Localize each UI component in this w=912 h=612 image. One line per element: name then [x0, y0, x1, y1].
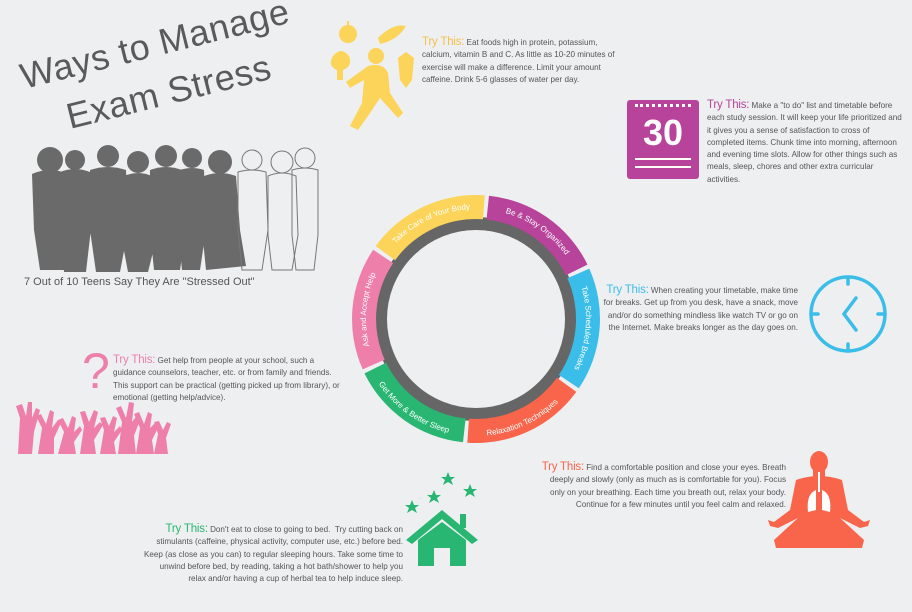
icon: meditation figure — [768, 451, 870, 548]
segment: relaxation techniques: Relaxation Techniques — [486, 400, 558, 436]
segment: be & stay organized: Be & Stay Organized — [506, 208, 570, 255]
text block: help: Try This: Get help from people at your school, such a guidance counselors, teacher, etc. or from family and friends. This support can be practical (getting picked up from library), or emotional (getting help/advice). — [113, 354, 340, 402]
segment: ask and accept help — [352, 250, 393, 370]
segment: ask and accept help: Ask and Accept Help — [360, 272, 376, 346]
segment: get more & better sleep: Get More & Better Sleep — [380, 382, 449, 434]
segment: relaxation techniques — [467, 378, 576, 443]
icon: runner with food — [330, 21, 414, 130]
segment: be & stay organized — [486, 196, 588, 276]
subtitle: 7 Out of 10 Teens Say They Are "Stressed Out" — [24, 276, 255, 288]
icon: calendar 30 — [627, 100, 699, 179]
text block: organized: Try This: Make a "to do" list and timetable before each study session. It will keep your life prioritized and it gives you a sense of satisfaction to cross of completed items. Chunk time into morning, afternoon and evening time slots. Allow for other things such as meals, sleep, chores and other extra curricular activities. — [707, 99, 902, 184]
icon: raised hands — [16, 402, 171, 454]
segment: get more & better sleep — [364, 362, 466, 442]
segment: take scheduled breaks — [559, 268, 600, 388]
segment: take care of your body — [376, 195, 485, 260]
icon: calendar 30: 30 — [643, 112, 683, 153]
icon: question mark: ? — [82, 343, 110, 399]
silhouettes group — [32, 145, 318, 272]
text block: breaks: Try This: When creating your timetable, make time for breaks. Get up from you desk, have a snack, move and/or do something mindless like watch TV or go on the Internet. Make breaks longer as the day goes on. — [604, 284, 798, 332]
text block: relaxation: Try This: Find a comfortable position and close your eyes. Breath deeply and slowly (only as much as is comfortable for you). Focus only on your breathing. Each time you breath out, relax your body. Continue for a few minutes until you feel calm and relaxed. — [542, 461, 786, 509]
text block: sleep: Try This: Don't eat to close to going to bed. Try cutting back on stimulants (caffeine, physical activity, computer use, etc.) before bed. Keep (as close as you can) to regular sleeping hours. Take some time to unwind before bed, by reading, taking a hot bath/shower to help you relax and/or having a cup of herbal tea to help induce sleep. — [144, 523, 403, 583]
icon: house with moon and stars — [405, 472, 478, 566]
icon: clock — [809, 275, 887, 353]
segment: take scheduled breaks: Take Scheduled Breaks — [574, 286, 592, 370]
segment: take care of your body: Take Care of Your Body — [392, 204, 470, 242]
title: Exam Stress — [62, 46, 275, 137]
text block: body: Try This: Eat foods high in protein, potassium, calcium, vitamin B and C. As little as 10-20 minutes of exercise will make a difference. Limit your amount caffeine. Drink 5-6 glasses of water per day. — [422, 36, 615, 84]
